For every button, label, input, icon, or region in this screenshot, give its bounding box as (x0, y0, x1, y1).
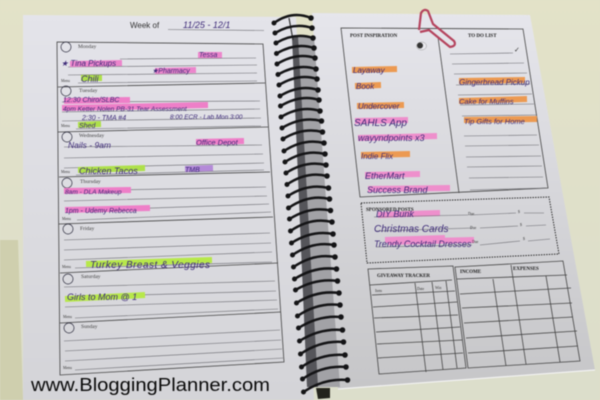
panel: giveaway tracker: Item (375, 289, 382, 293)
day labels: Menu (61, 79, 70, 83)
handwriting: left page: 8:00 ECR - Lab Mon 3:00 (170, 114, 243, 121)
weekly table (57, 42, 284, 375)
panel: sponsored posts: Christmas Cards (374, 224, 448, 235)
day labels: Saturday (81, 274, 101, 280)
handwriting: left page: Girls to Mom @ 1 (67, 292, 137, 302)
day labels: Tuesday (79, 88, 98, 94)
handwriting: right page: Book (356, 82, 375, 91)
panel: giveaway tracker (368, 266, 466, 374)
handwriting: right page: Indie Flix (361, 152, 394, 161)
handwriting: left page (61, 52, 243, 302)
panel: sponsored posts: SPONSORED POSTS (366, 208, 414, 213)
day labels: Wednesday (79, 133, 104, 139)
panel: giveaway tracker: GIVEAWAY TRACKER (377, 274, 430, 279)
handwriting: right page (353, 66, 530, 195)
handwriting: right page: Cake for Muffins (459, 97, 514, 106)
day labels: Menu (62, 265, 71, 269)
day labels: Sunday (81, 324, 98, 330)
handwriting: left page: ★ Tina Pickups (61, 59, 116, 68)
handwriting: left page: TMB (185, 167, 200, 174)
handwriting: left page: Tessa (199, 52, 218, 59)
handwriting: right page: SAHLS App (354, 118, 407, 129)
handwriting: left page: Turkey Breast & Veggies (90, 260, 210, 271)
panel: post inspiration and to do list (341, 28, 548, 197)
day labels: Thursday (80, 179, 101, 185)
panel: sponsored posts: $ (523, 237, 525, 241)
day labels: Monday (78, 44, 97, 50)
panel: income and expenses: INCOME (460, 270, 482, 275)
handwriting: left page: 4pm Ketter Nolen PB-31 Tear Assessment (63, 106, 188, 113)
handwriting: left page: 8am - DLA Makeup (65, 189, 122, 196)
panel: giveaway tracker: Win (435, 286, 441, 290)
binding hole (416, 42, 426, 50)
handwriting: left page: 2:30 - TMA #4 (81, 115, 126, 122)
highlights: right page (352, 69, 537, 242)
handwriting: right page: Tip Gifts for Home (464, 117, 525, 126)
icon: pink paper clip (419, 10, 455, 47)
handwriting: right page: EtherMart (365, 171, 405, 181)
day labels: Menu (61, 170, 70, 174)
heading: week of: 11/25 - 12/1 (183, 20, 230, 30)
panel: sponsored posts (361, 197, 559, 263)
handwriting: left page: Office Depot (196, 138, 239, 147)
day labels: Menu (61, 124, 70, 128)
handwriting: left page: Chili (81, 74, 100, 84)
panel: sponsored posts: Due (472, 240, 479, 244)
handwriting: right page: wayyndpoints x3 (358, 133, 425, 143)
handwriting: right page: Layaway (353, 66, 386, 75)
panel: income and expenses: EXPENSES (513, 267, 539, 272)
day labels (61, 42, 104, 370)
panel: sponsored posts: Due (468, 212, 475, 216)
panel: sponsored posts: Trendy Cocktail Dresses (374, 239, 472, 249)
heading: week of: Week of (130, 21, 160, 30)
handwriting: left page: 1pm - Udemy Rebecca (65, 208, 137, 215)
panel: income and expenses (455, 261, 580, 368)
day labels: Menu (63, 315, 72, 319)
highlights: left page (62, 55, 244, 299)
handwriting: right page: Success Brand (367, 185, 429, 195)
handwriting: left page: 12:30 Chiro/SLBC (63, 97, 120, 104)
day labels: Menu (62, 217, 71, 221)
panel: sponsored posts: DIY Bunk (376, 209, 414, 219)
panel: right planner page (312, 13, 595, 389)
panel: sponsored posts: Due (470, 226, 477, 230)
handwriting: right page: Undercover (358, 102, 400, 111)
panel: post inspiration and to do list: POST INSPIRATION (350, 34, 398, 39)
panel: post inspiration and to do list: ✓ (514, 46, 520, 54)
panel: sponsored posts: $ (518, 210, 520, 214)
handwriting: left page: ★Pharmacy (152, 67, 190, 75)
day labels: Menu (63, 366, 72, 370)
handwriting: left page: Nails - 9am (68, 140, 111, 150)
day labels: Friday (80, 226, 95, 232)
heading: week of (130, 20, 264, 30)
coil gutter between the pages (289, 18, 340, 399)
handwriting: left page: Shed (79, 123, 96, 130)
handwriting: left page: Chicken Tacos (79, 166, 138, 176)
handwriting: right page: Gingerbread Pickup (459, 78, 530, 87)
panel: sponsored posts: $ (520, 223, 522, 227)
panel: post inspiration and to do list: TO DO LIST (468, 34, 497, 39)
panel: giveaway tracker: Date (417, 287, 424, 291)
spiral binding coil (274, 15, 348, 392)
panel: left planner page (23, 15, 314, 400)
watermark: website address: www.BloggingPlanner.com (30, 374, 270, 395)
